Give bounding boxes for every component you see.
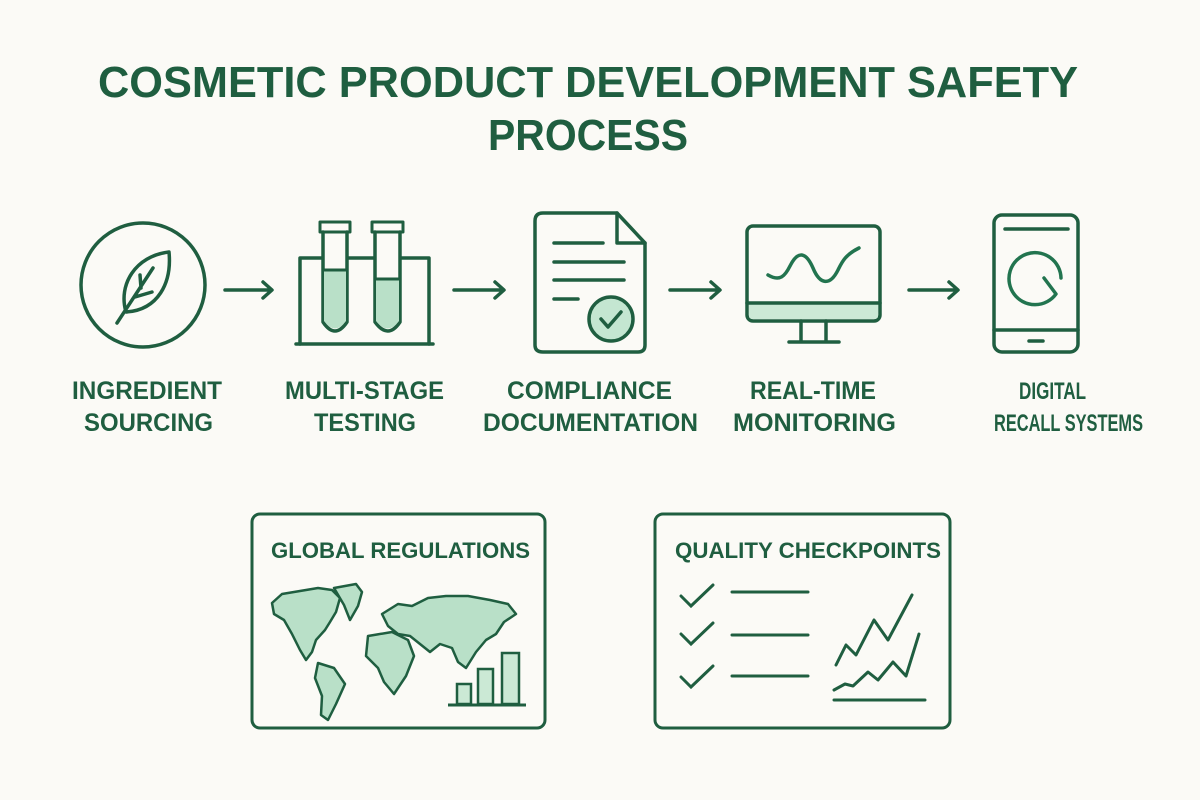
bar chart — [448, 653, 526, 705]
step labels: MONITORING — [733, 409, 896, 437]
panel: quality checkpoints — [655, 514, 950, 728]
title: PROCESS — [488, 111, 688, 160]
arrow 3 — [670, 282, 720, 298]
step labels: REAL-TIME — [750, 377, 876, 405]
icon: test tubes — [296, 222, 433, 344]
world map — [272, 584, 516, 720]
step labels — [72, 377, 1143, 437]
step labels: COMPLIANCE — [507, 377, 672, 405]
icon: document with check — [535, 213, 645, 352]
icon: phone — [994, 215, 1078, 352]
arrow 1 — [225, 282, 272, 298]
title: COSMETIC PRODUCT DEVELOPMENT SAFETY — [98, 58, 1078, 107]
step labels: DIGITAL — [1019, 378, 1086, 405]
panel title: quality checkpoints: QUALITY CHECKPOINTS — [675, 538, 941, 563]
step labels: TESTING — [314, 409, 416, 437]
panel title: global regulations: GLOBAL REGULATIONS — [271, 538, 530, 563]
arrow 2 — [454, 282, 504, 298]
step labels: SOURCING — [84, 409, 213, 437]
panel: global regulations — [252, 514, 545, 728]
checklist — [681, 585, 808, 687]
step labels: INGREDIENT — [72, 377, 222, 405]
arrow 4 — [909, 282, 958, 298]
title — [98, 58, 1078, 160]
step labels: MULTI-STAGE — [285, 377, 444, 405]
icon: monitor — [747, 226, 880, 342]
step labels: DOCUMENTATION — [483, 409, 698, 437]
line chart — [834, 595, 925, 700]
icon: leaf in circle — [81, 223, 205, 347]
